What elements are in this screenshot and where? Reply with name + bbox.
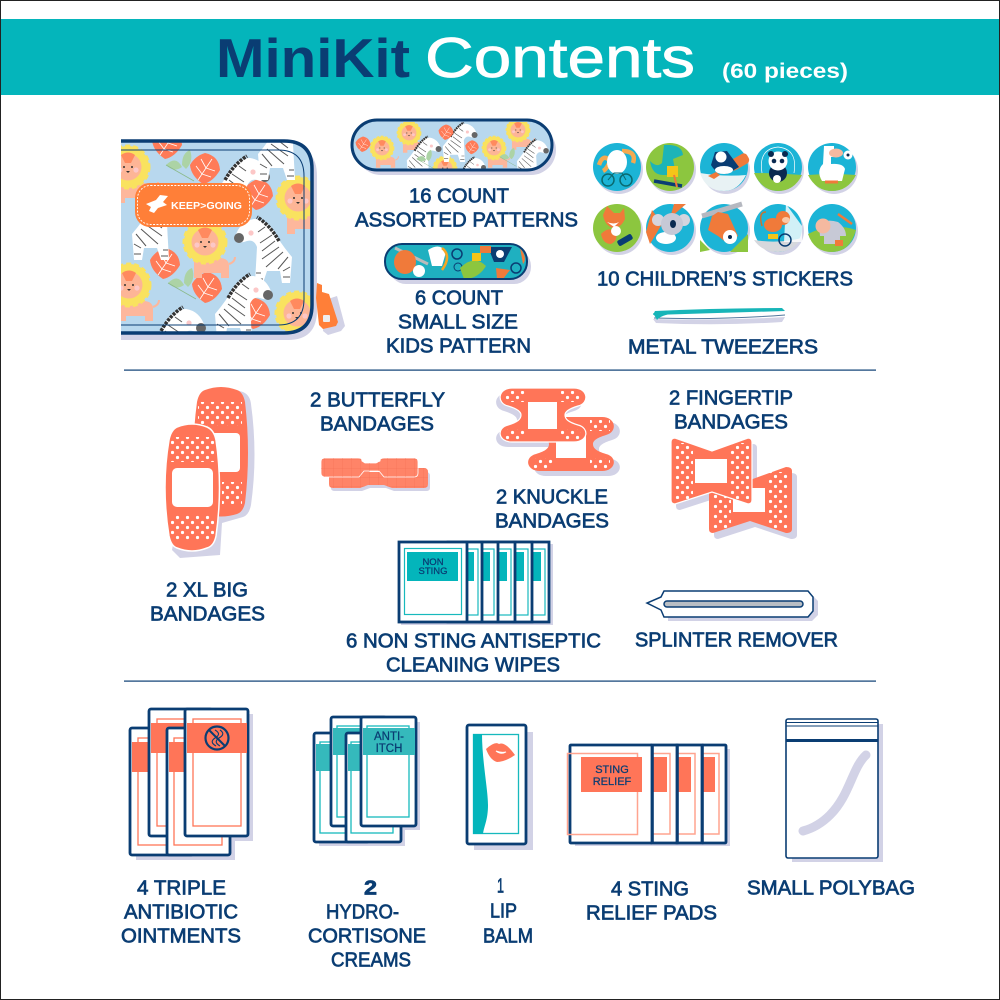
label: 16 count: 16 COUNT <box>409 186 509 208</box>
front bandage <box>165 424 220 551</box>
pad 1: STING <box>595 764 629 776</box>
label: lip: LIP <box>490 900 517 922</box>
label: relief pads: RELIEF PADS <box>586 902 717 924</box>
label: hydro: HYDRO- <box>326 902 399 924</box>
sticker: dinosaur <box>646 143 694 191</box>
icon: lips <box>486 743 515 762</box>
title banner <box>1 19 999 95</box>
icon: ten round stickers <box>593 143 858 255</box>
front wipe: NON <box>422 557 444 568</box>
front wipe <box>399 542 467 622</box>
icon: XL big bandages <box>165 387 254 558</box>
sticker: sloth <box>700 204 748 252</box>
icon: antibiotic ointments <box>130 709 253 860</box>
label: 2 XL: 2 XL BIG <box>166 580 248 602</box>
label: bandages: BANDAGES <box>150 604 265 626</box>
icon: no germs <box>206 726 228 750</box>
icon: patterned pouch <box>121 139 345 340</box>
label: 4 sting: 4 STING <box>611 878 689 900</box>
label: 2: 2 <box>364 878 377 900</box>
label: splinter remover: SPLINTER REMOVER <box>635 630 838 652</box>
label: ointments: OINTMENTS <box>121 926 241 948</box>
label: bandages: BANDAGES <box>674 412 788 434</box>
sticker: llama <box>808 143 856 191</box>
piece count: (60 pieces) <box>722 60 848 83</box>
title: Contents: Contents <box>425 26 695 90</box>
sticker: elephant <box>808 204 856 252</box>
label: 1: 1 <box>497 876 504 898</box>
label: 6 count: 6 COUNT <box>415 288 503 310</box>
sticker: monkey <box>754 204 802 252</box>
label: balm: BALM <box>483 926 533 948</box>
icon: lip balm <box>467 725 533 850</box>
label: 2 knuckle: 2 KNUCKLE <box>496 486 608 508</box>
label: small size: SMALL SIZE <box>398 312 518 334</box>
label: stickers: 10 CHILDREN’S STICKERS <box>597 268 853 290</box>
label: small polybag: SMALL POLYBAG <box>747 878 915 900</box>
icon: 16 count adhesive strip <box>350 118 556 175</box>
label: bandages: BANDAGES <box>495 510 609 532</box>
icon: hydrocortisone creams <box>314 717 420 846</box>
divider <box>124 370 876 371</box>
icon: small polybag <box>786 719 883 862</box>
sticker: penguin <box>700 143 751 191</box>
label: creams: CREAMS <box>331 950 411 972</box>
pad 1: RELIEF <box>593 776 632 788</box>
label: antibiotic: ANTIBIOTIC <box>124 902 238 924</box>
front wipe: STING <box>418 566 448 577</box>
brand label <box>135 183 252 227</box>
back bandage <box>194 387 248 516</box>
pad 1 <box>568 745 652 843</box>
icon: antiseptic wipes <box>399 542 553 625</box>
label: cleaning wipes: CLEANING WIPES <box>386 654 560 676</box>
pad 2 <box>645 745 677 843</box>
pad 4 <box>695 745 726 843</box>
label: cortisone: CORTISONE <box>308 926 426 948</box>
label: 2 fingertip: 2 FINGERTIP <box>669 388 793 410</box>
icon: 6 count kids strip <box>385 244 531 284</box>
sticker: koala <box>646 204 694 252</box>
zipper tag <box>316 283 345 335</box>
pad 3 <box>670 745 702 843</box>
icon: knuckle bandages <box>496 388 620 476</box>
icon: fingertip bandages <box>671 438 797 539</box>
icon: sting relief pads <box>568 745 730 846</box>
brand label: KEEP>GOING <box>171 201 242 212</box>
icon: splinter remover <box>647 591 818 621</box>
sticker: fox <box>593 204 641 252</box>
icon: hydrocortisone creams: ITCH <box>376 743 402 755</box>
label: kids pattern: KIDS PATTERN <box>386 336 531 358</box>
label: 2 butterfly: 2 BUTTERFLY <box>310 390 445 412</box>
icon: tweezers <box>653 308 785 324</box>
icon: butterfly bandages <box>321 458 430 491</box>
sticker: unicorn <box>593 143 641 191</box>
label: tweezers: METAL TWEEZERS <box>628 336 818 358</box>
icon: hydrocortisone creams: ANTI- <box>374 731 404 743</box>
label: 4 triple: 4 TRIPLE <box>137 878 226 900</box>
label: wipes: 6 NON STING ANTISEPTIC <box>346 630 601 652</box>
sticker: panda <box>754 143 802 191</box>
divider <box>124 680 876 682</box>
label: bandages: BANDAGES <box>320 414 434 436</box>
label: assorted patterns: ASSORTED PATTERNS <box>355 210 578 232</box>
title: MiniKit: MiniKit <box>216 27 410 89</box>
